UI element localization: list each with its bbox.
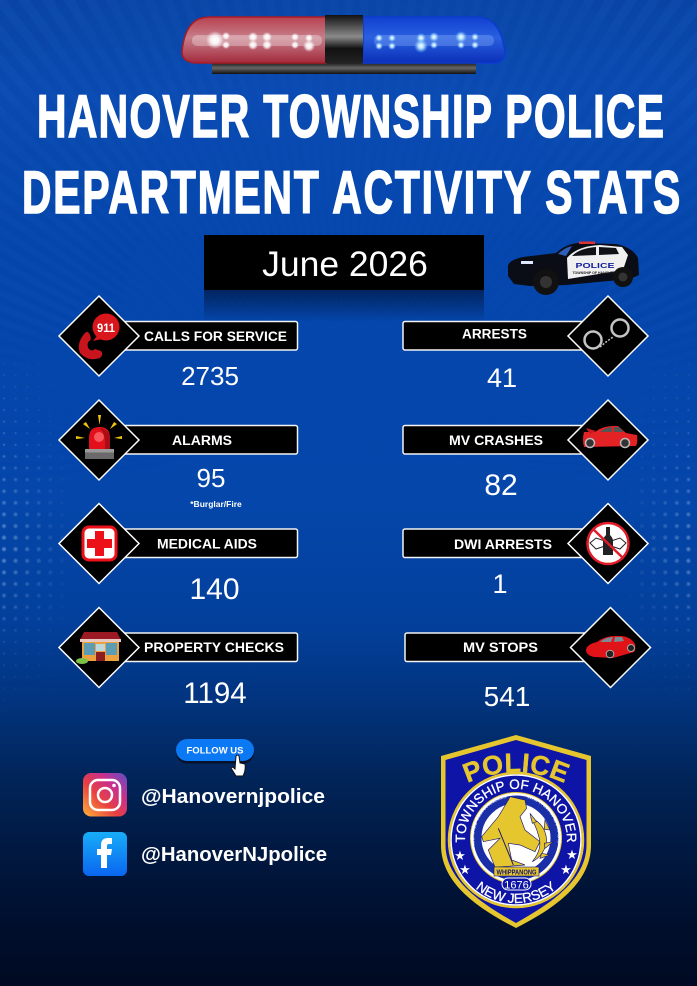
icon: red car <box>586 636 635 658</box>
button: follow us <box>176 739 254 776</box>
icon: 911 phone <box>79 314 120 359</box>
label: calls for service: CALLS FOR SERVICE <box>144 329 287 344</box>
icon: 911 phone: 911 <box>97 321 115 335</box>
badge: police text: POLICE <box>462 753 570 783</box>
button: follow us: FOLLOW US <box>186 746 244 756</box>
title <box>22 83 680 226</box>
stat: mv crashes: 82 <box>484 469 518 502</box>
label: arrests: ARRESTS <box>462 326 527 342</box>
stat: property checks: 1194 <box>183 677 247 710</box>
police badge: WHIPPANONG <box>496 870 537 876</box>
label: medical aids: MEDICAL AIDS <box>157 536 257 552</box>
badge: year <box>502 878 531 890</box>
badge: stars <box>454 847 578 877</box>
month banner <box>204 235 484 322</box>
badge: inner band text: WHIPPANY MALAPARDIS <box>528 794 562 844</box>
stat: mv stops: 541 <box>484 681 530 712</box>
label: dwi arrests: DWI ARRESTS <box>454 537 552 552</box>
icon: handcuffs <box>584 320 628 348</box>
stat: dwi arrests: 1 <box>492 569 508 599</box>
label: property checks: PROPERTY CHECKS <box>144 640 284 655</box>
badge: stars: ★ <box>566 847 578 862</box>
icon: crashed car <box>583 426 637 448</box>
badge: stars: ★ <box>454 848 466 863</box>
icon: storefront <box>76 632 121 664</box>
panel: property checks <box>59 608 298 688</box>
panel: calls for service <box>59 296 298 376</box>
police badge: 1676 <box>504 880 529 892</box>
panel: mv crashes <box>403 400 648 480</box>
month banner: June 2026 <box>262 244 428 284</box>
stat: calls for service: 2735 <box>181 361 239 391</box>
halftone dots right <box>640 363 691 689</box>
badge: township text: TOWNSHIP OF HANOVER <box>455 779 576 842</box>
icon: police car <box>508 242 639 295</box>
badge: new jersey text: NEW JERSEY <box>476 880 554 904</box>
stat: arrests: 41 <box>487 363 517 393</box>
title: DEPARTMENT ACTIVITY STATS <box>22 159 680 226</box>
handle: facebook: @HanoverNJpolice <box>141 844 327 866</box>
icon: pointer hand <box>231 755 245 776</box>
badge: figure <box>482 797 553 867</box>
footnote: burglar/fire: *Burglar/Fire <box>190 499 242 509</box>
label: mv stops: MV STOPS <box>463 640 538 655</box>
icon: instagram <box>83 773 127 816</box>
icon: police light bar <box>182 15 505 74</box>
halftone dots left <box>2 363 63 689</box>
icon: police car: POLICE <box>576 263 615 270</box>
panel: mv stops <box>405 608 650 688</box>
handle: instagram: @Hanovernjpolice <box>141 786 325 808</box>
title: HANOVER TOWNSHIP POLICE <box>37 83 664 150</box>
panel: alarms <box>59 400 298 480</box>
label: alarms: ALARMS <box>172 433 232 448</box>
icon: alarm beacon <box>76 415 122 459</box>
icon: facebook <box>83 832 127 876</box>
icon: first aid cross <box>83 527 116 560</box>
badge: stars: ★ <box>459 862 471 877</box>
stat: alarms: 95 <box>197 463 225 493</box>
badge: stars: ★ <box>560 862 572 877</box>
panel: dwi arrests <box>403 504 648 584</box>
label: mv crashes: MV CRASHES <box>449 433 543 448</box>
badge: ribbon <box>494 867 539 876</box>
badge: inner band text: MONROE CEDAR KNOLLS <box>470 794 506 845</box>
stat: medical aids: 140 <box>189 573 240 606</box>
panel: medical aids <box>59 504 298 584</box>
icon: no drinking and driving <box>588 523 628 564</box>
icon: police car: TOWNSHIP OF HANOVER <box>572 271 616 275</box>
badge: inner band text <box>470 794 562 845</box>
police badge <box>441 735 591 928</box>
panel: arrests <box>403 296 648 376</box>
